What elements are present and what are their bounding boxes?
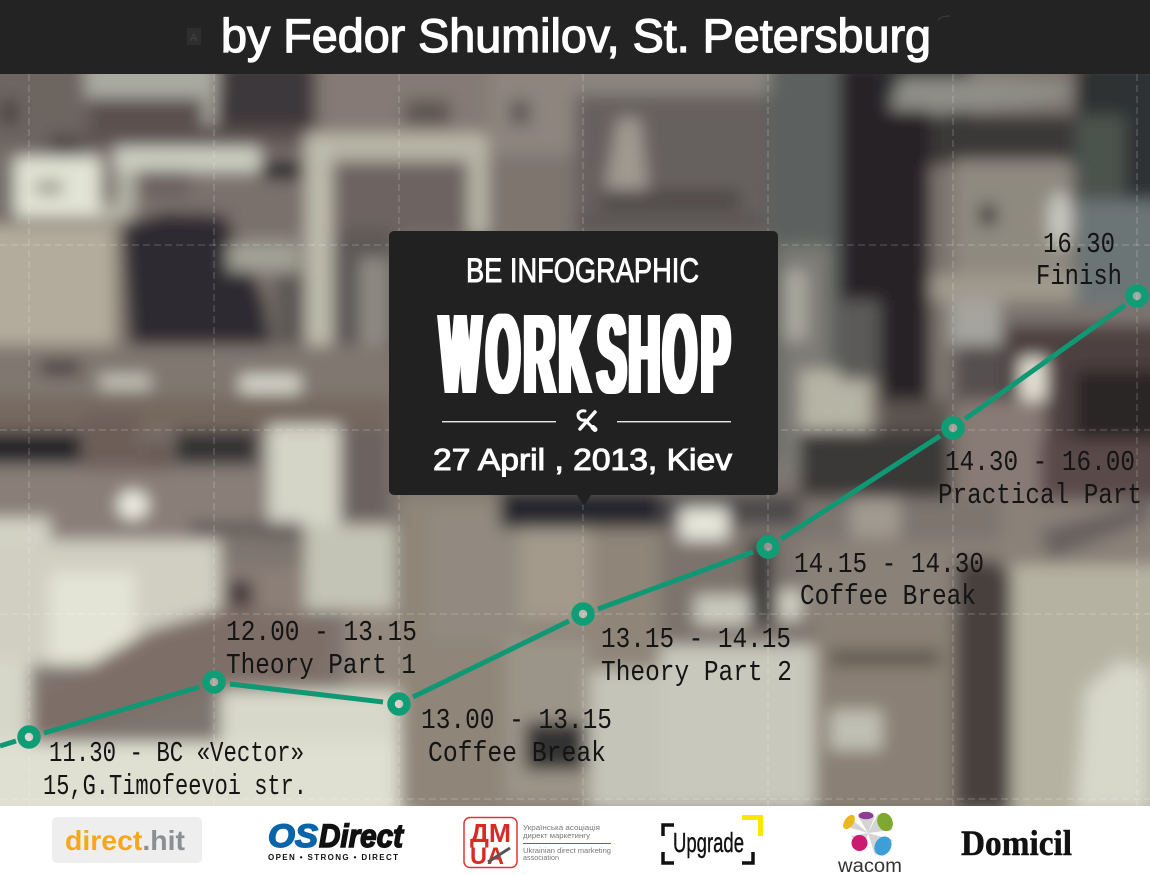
logo: DM UA association	[464, 818, 611, 870]
label: 14.30 Practical Part	[938, 446, 1142, 512]
timeline line	[0, 305, 1125, 746]
logo: DM UA association: ДМ	[470, 818, 511, 848]
logo: direct.hit: direct.hit	[65, 825, 185, 856]
logo: wacom	[837, 810, 902, 875]
faint artifact: corner arc	[938, 16, 950, 21]
label: 11.30 BC Vector: 11.30 - BC «Vector»	[49, 737, 304, 770]
logo: Upgrade	[663, 818, 760, 863]
logo: OSDirect: OS	[268, 818, 319, 854]
label: 14.15 Coffee Break: Coffee Break	[800, 580, 976, 613]
faint artifact: small A box	[187, 28, 201, 45]
logo: DM UA association: Українська асоціація	[523, 823, 600, 832]
sponsor strip	[0, 806, 1150, 875]
banner title: by Fedor Shumilov, St. Petersburg	[221, 9, 931, 62]
top banner	[0, 0, 1150, 74]
right divider	[617, 421, 731, 422]
logo: OSDirect	[268, 818, 404, 862]
label: 11.30 BC Vector	[43, 737, 307, 803]
label: 12.00 Theory Part 1: 12.00 - 13.15	[226, 616, 417, 649]
logo: Domicil: Domicil	[961, 823, 1072, 863]
timeline nodes	[21, 288, 1145, 745]
left divider	[442, 421, 556, 422]
icon: crossed tools	[578, 411, 595, 430]
label: 13.00 Coffee Break: Coffee Break	[428, 737, 606, 770]
logo: OSDirect: Direct	[319, 818, 404, 854]
label: 11.30 BC Vector: 15,G.Timofeevoi str.	[43, 770, 307, 803]
logo: direct.hit	[52, 817, 202, 863]
logo: DM UA association: association	[523, 853, 559, 862]
label: 14.15 Coffee Break: 14.15 - 14.30	[794, 548, 984, 581]
label: 14.15 Coffee Break	[794, 548, 984, 613]
callout box with pointer	[389, 231, 778, 506]
callout kicker: BE INFOGRAPHIC	[466, 252, 699, 290]
logo: DM UA association: Ukrainian direct marketing	[523, 846, 611, 855]
label: 16.30 Finish	[1036, 228, 1122, 293]
label: 13.15 Theory Part 2: 13.15 - 14.15	[601, 623, 791, 656]
label: 16.30 Finish: 16.30	[1043, 228, 1115, 261]
logo: DM UA association: UA	[470, 843, 504, 870]
callout date: 27 April , 2013, Kiev	[433, 442, 733, 477]
logo: DM UA association: директ маркетингу	[523, 831, 590, 840]
faint artifact: small A box: A	[190, 32, 198, 44]
label: 13.15 Theory Part 2: Theory Part 2	[601, 656, 792, 689]
label: 13.00 Coffee Break: 13.00 - 13.15	[421, 704, 612, 737]
callout headline: WORKSHOP	[440, 293, 730, 418]
label: 12.00 Theory Part 1	[226, 616, 417, 682]
label: 12.00 Theory Part 1: Theory Part 1	[226, 649, 416, 682]
panel: workshop callout	[389, 231, 778, 506]
logo: Upgrade: Upgrade	[673, 827, 744, 858]
label: 13.00 Coffee Break	[421, 704, 612, 770]
label: 13.15 Theory Part 2	[601, 623, 792, 689]
label: 16.30 Finish: Finish	[1036, 260, 1122, 293]
logo: OSDirect: OPEN • STRONG • DIRECT	[268, 853, 398, 862]
